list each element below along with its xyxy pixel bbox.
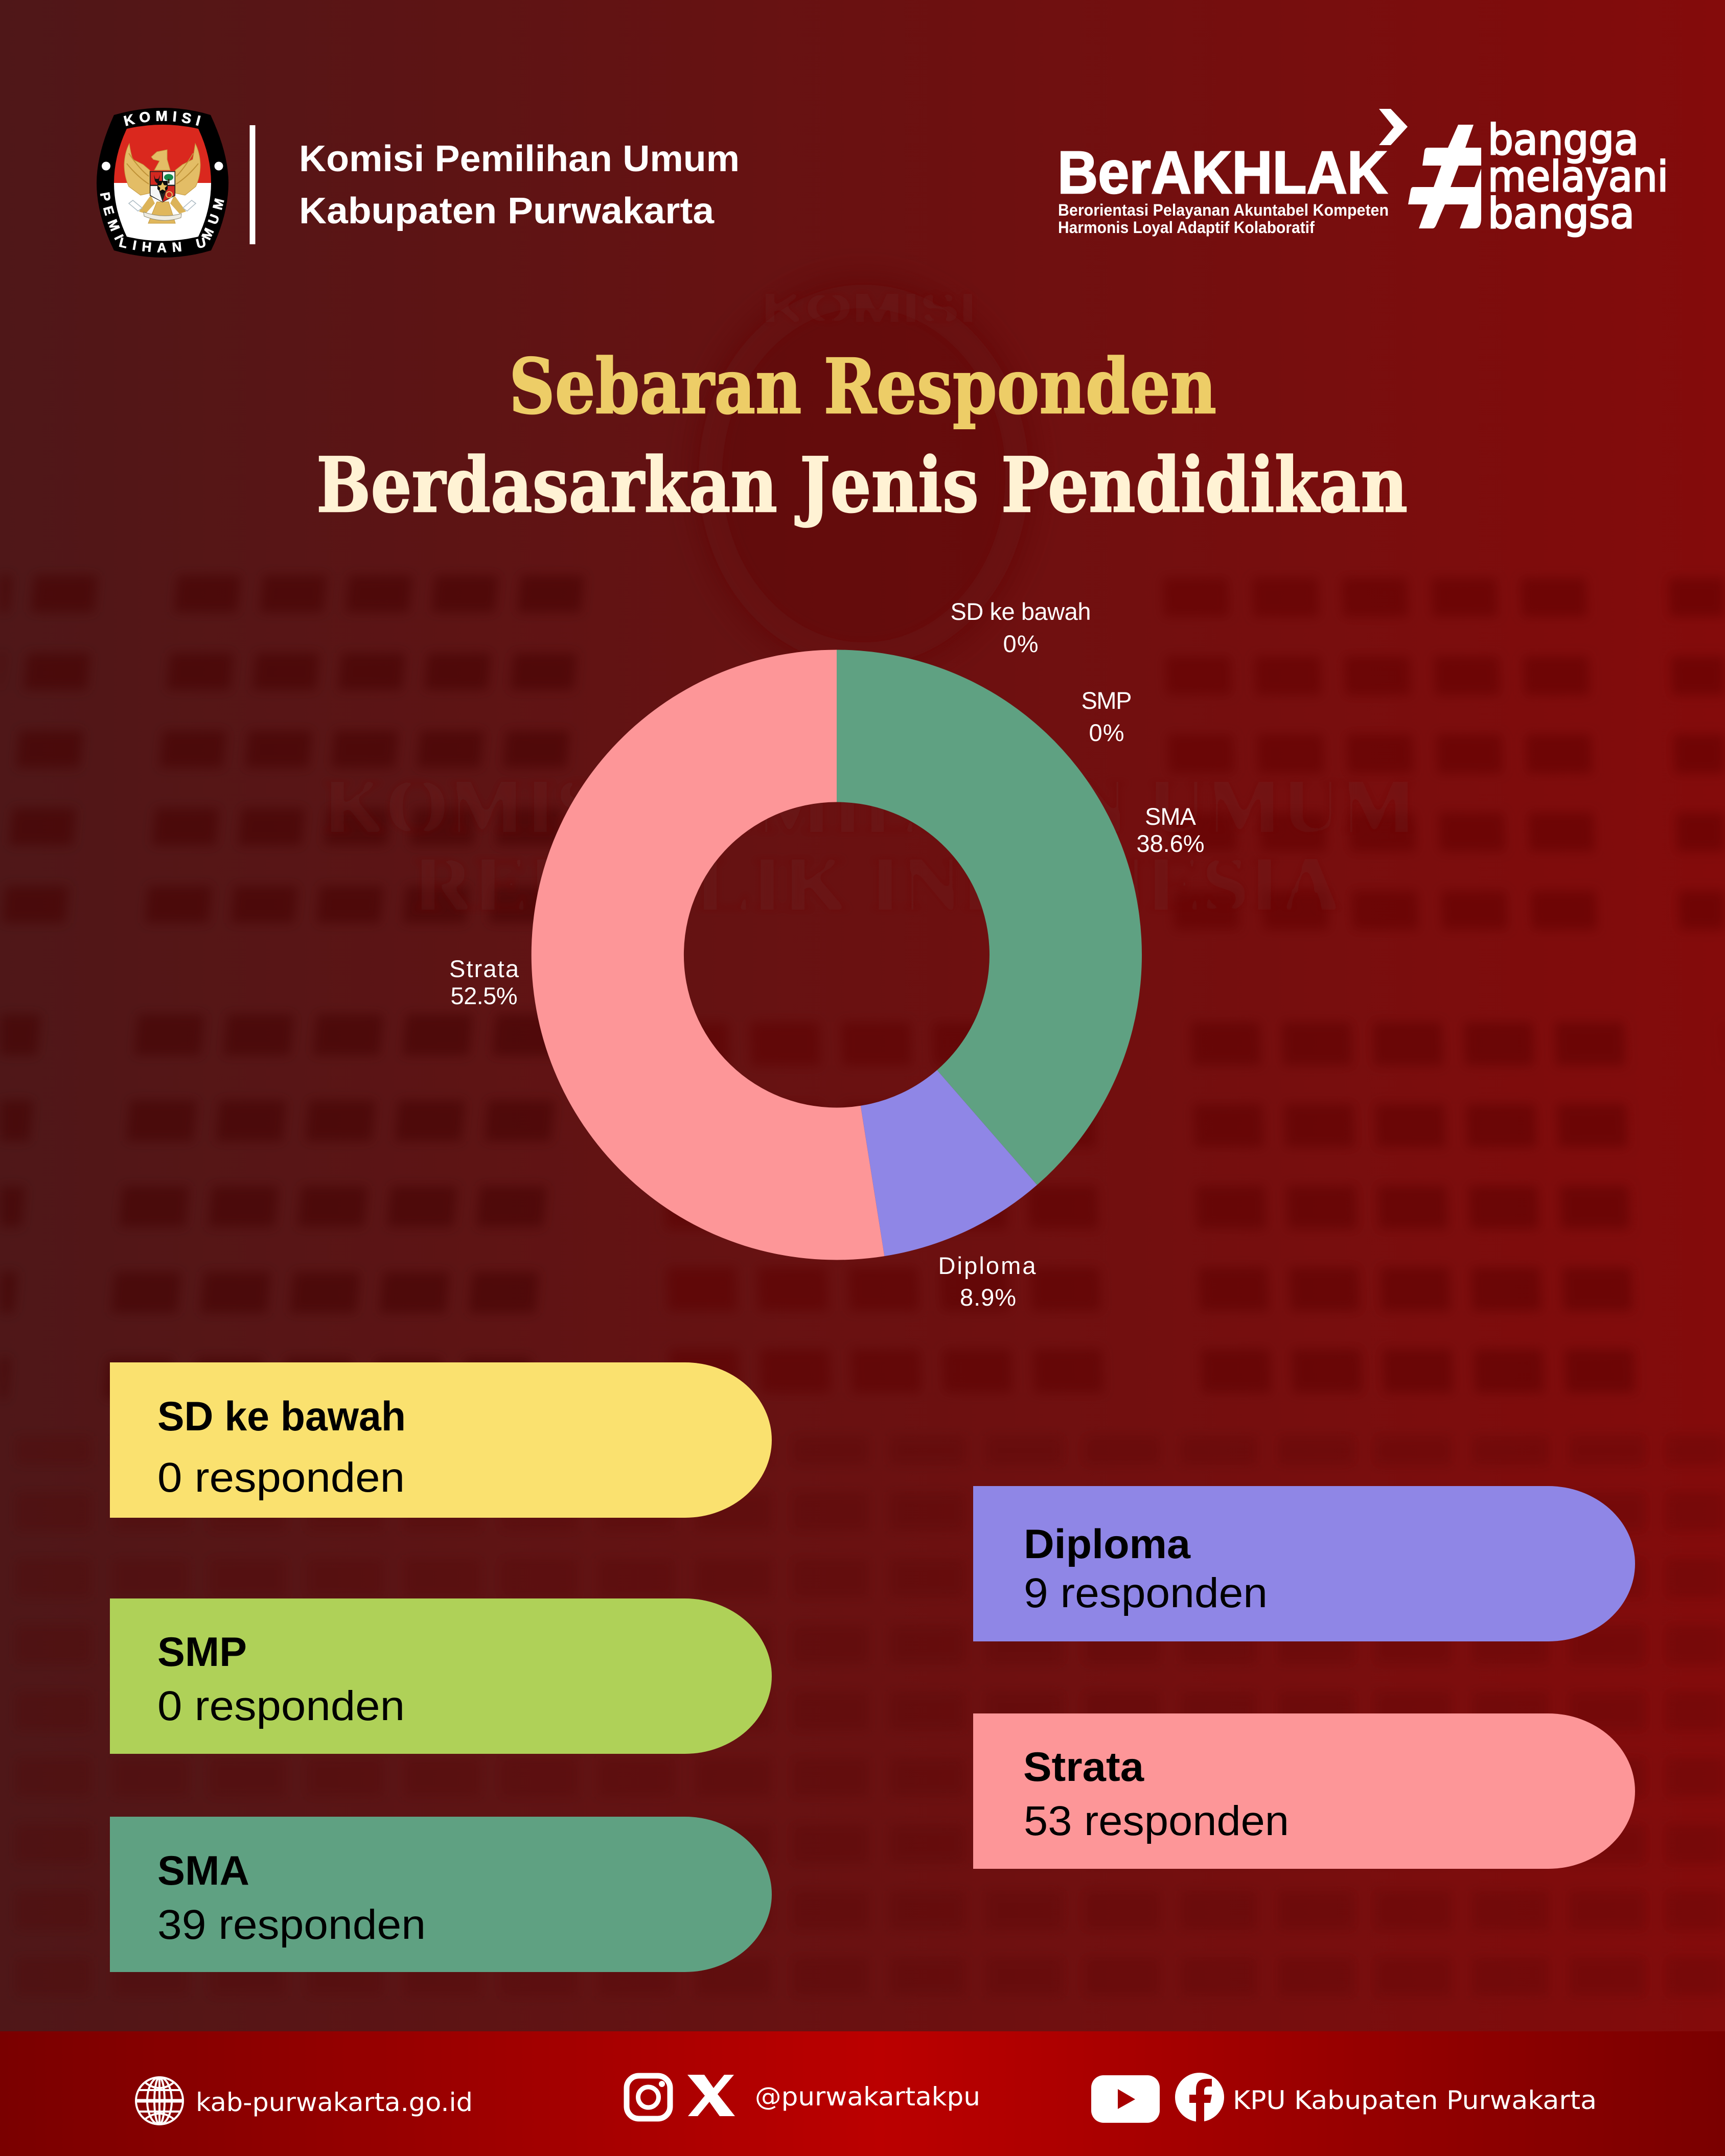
chart labels: Diploma xyxy=(938,1252,1036,1279)
background: blurred building photo: REPUBLIK INDONESIA xyxy=(413,842,1341,926)
chart labels: 38.6% xyxy=(1137,830,1204,857)
logo: BerAKHLAK: BerAKHLAK xyxy=(1057,139,1388,206)
card: Strata: Strata xyxy=(1023,1744,1144,1790)
card: SMA xyxy=(110,1817,772,1972)
card: SMP: SMP xyxy=(157,1629,247,1675)
card: Diploma: Diploma xyxy=(1024,1521,1191,1567)
icon: KPU logo: PEMILIHAN UMUM xyxy=(97,191,227,256)
header: institution name: Kabupaten Purwakarta xyxy=(299,191,715,231)
card: SD ke bawah: 0 responden xyxy=(157,1454,405,1501)
icon: garuda xyxy=(124,144,200,223)
icon: X xyxy=(687,2075,735,2116)
title xyxy=(316,342,1408,529)
card: Strata: 53 responden xyxy=(1024,1798,1289,1844)
icon: globe xyxy=(136,2077,183,2124)
donut chart xyxy=(532,650,1142,1260)
chart labels: SD ke bawah xyxy=(951,598,1091,625)
logo: BerAKHLAK xyxy=(1057,109,1408,237)
logo: hash bangga melayani bangsa: bangsa xyxy=(1488,190,1635,238)
card: Diploma: 9 responden xyxy=(1024,1570,1268,1616)
logo: BerAKHLAK: Harmonis Loyal Adaptif Kolaboratif xyxy=(1058,218,1315,237)
icon: facebook xyxy=(1175,2073,1224,2122)
logo: hash bangga melayani bangsa: bangga xyxy=(1488,116,1639,165)
card: SMA: 39 responden xyxy=(157,1902,426,1948)
chart labels: 52.5% xyxy=(451,982,517,1009)
chart labels xyxy=(449,598,1204,1311)
chart labels: SMP xyxy=(1082,687,1132,714)
slice: SMA xyxy=(837,650,1142,1185)
icon: KPU logo: KOMISI xyxy=(124,110,201,126)
title: Berdasarkan Jenis Pendidikan xyxy=(316,441,1408,529)
card: SD ke bawah: SD ke bawah xyxy=(157,1394,406,1440)
chart labels: 8.9% xyxy=(960,1284,1016,1311)
chart labels: SMA xyxy=(1145,803,1197,830)
footer bar xyxy=(0,2031,1725,2156)
chart labels: 0% xyxy=(1003,630,1039,657)
card: SMP xyxy=(110,1598,772,1754)
header: institution name xyxy=(299,138,740,231)
header: institution name: Komisi Pemilihan Umum xyxy=(299,138,740,179)
slice: Strata xyxy=(532,650,884,1260)
background: blurred building photo: KOMISI PEMILIHAN UMUM xyxy=(323,764,1417,849)
slice: Diploma xyxy=(861,1070,1037,1256)
footer: facebook and youtube name: KPU Kabupaten Purwakarta xyxy=(1233,2085,1597,2115)
icon: hash xyxy=(1408,125,1481,228)
logo: hash bangga melayani bangsa xyxy=(1408,116,1668,238)
chart labels: Strata xyxy=(449,955,519,982)
background: blurred building photo: KOMISI xyxy=(762,285,976,331)
icon: youtube xyxy=(1091,2075,1160,2123)
card: SD ke bawah xyxy=(110,1362,772,1518)
card: SMP: 0 responden xyxy=(157,1683,405,1729)
divider xyxy=(249,125,256,244)
icon: KPU logo xyxy=(97,108,228,258)
chart labels: 0% xyxy=(1089,719,1124,746)
icon: instagram xyxy=(627,2076,670,2119)
card: Strata xyxy=(973,1713,1635,1869)
footer: website: kab-purwakarta.go.id xyxy=(196,2088,473,2117)
card: Diploma xyxy=(973,1486,1635,1641)
title: Sebaran Responden xyxy=(509,342,1216,431)
footer: social handle: @purwakartakpu xyxy=(755,2082,980,2112)
logo: BerAKHLAK: Berorientasi Pelayanan Akuntabel Kompeten xyxy=(1058,201,1389,219)
card: SMA: SMA xyxy=(157,1848,249,1894)
logo: hash bangga melayani bangsa: melayani xyxy=(1488,153,1668,201)
